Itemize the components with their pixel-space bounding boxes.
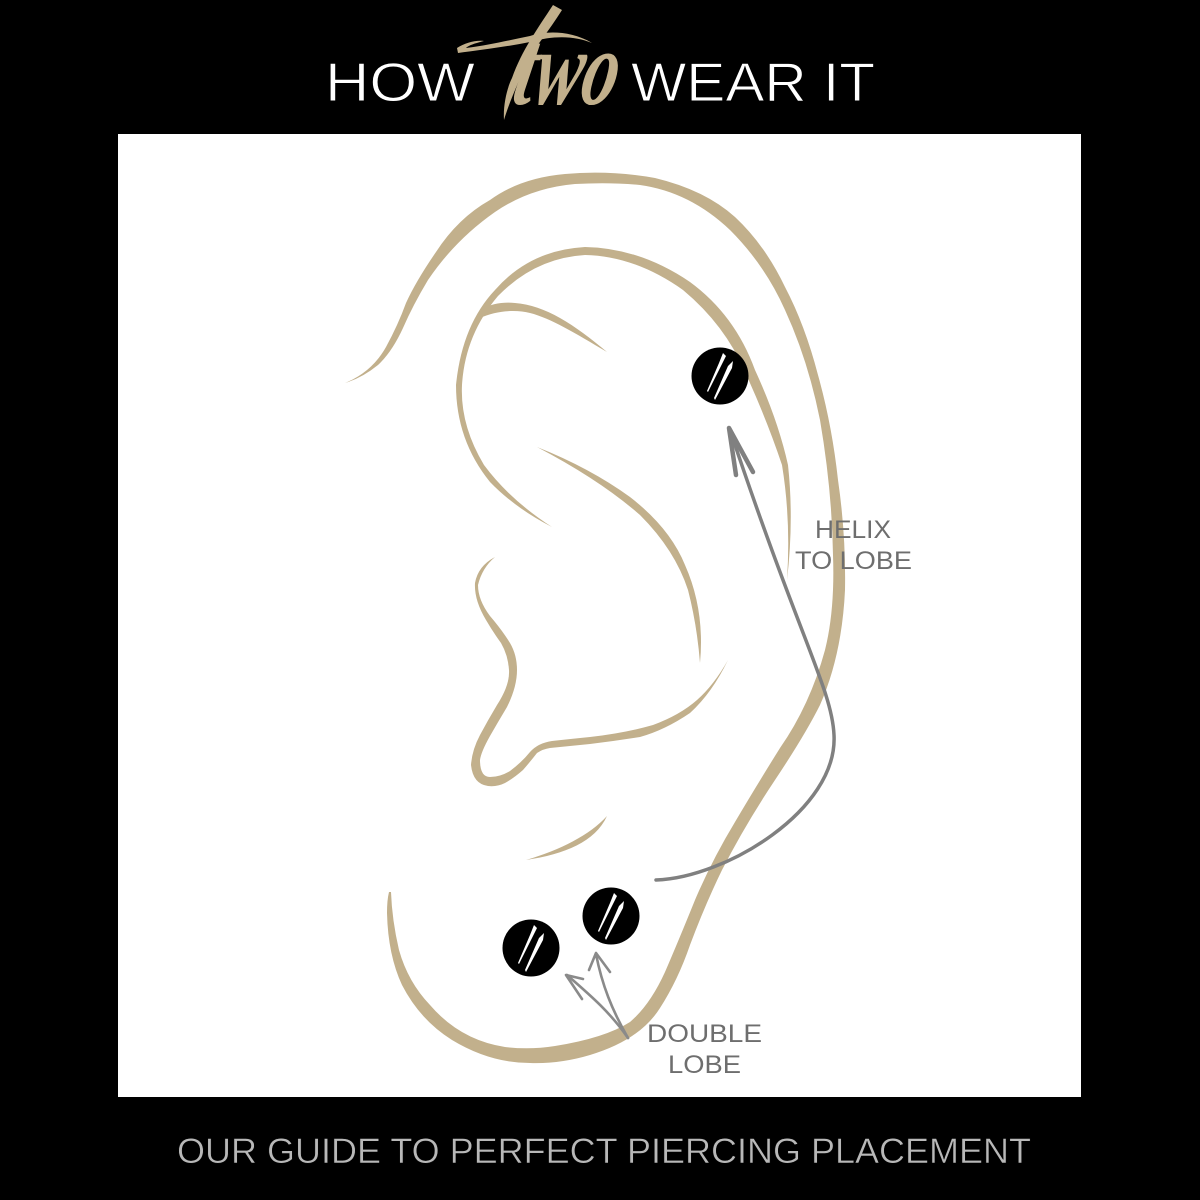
- arrow: helix to lobe: [656, 428, 834, 880]
- label: double lobe: LOBE: [668, 1051, 741, 1079]
- stud: upper lobe: [582, 888, 640, 944]
- label: helix to lobe: [795, 516, 912, 575]
- ear illustration: [345, 173, 845, 1063]
- inner helix curve: [456, 247, 791, 580]
- stud: lower lobe: [502, 920, 560, 976]
- footer tagline: OUR GUIDE TO PERFECT PIERCING PLACEMENT: [177, 1132, 1031, 1171]
- stud: helix: [692, 348, 748, 404]
- label: double lobe: [647, 1020, 762, 1079]
- label: helix to lobe: HELIX: [815, 516, 891, 544]
- lobe crease: [526, 816, 607, 860]
- ear outer contour: [345, 173, 845, 1063]
- label: helix to lobe: TO LOBE: [795, 547, 912, 575]
- concha and tragus curve: [471, 557, 728, 786]
- title script word: two: [457, 5, 633, 128]
- title words: WEAR IT: WEAR IT: [631, 51, 875, 113]
- arrow: to lower lobe stud: [566, 975, 628, 1038]
- upper fold arc: [480, 303, 607, 352]
- panel: white ear diagram: [118, 134, 1081, 1097]
- label: double lobe: DOUBLE: [647, 1020, 762, 1048]
- arrow: to upper lobe stud: [589, 953, 628, 1038]
- title word: HOW: HOW: [325, 51, 475, 113]
- title: [325, 5, 875, 128]
- title script word: two: two: [505, 10, 633, 128]
- antihelix curve: [537, 447, 701, 663]
